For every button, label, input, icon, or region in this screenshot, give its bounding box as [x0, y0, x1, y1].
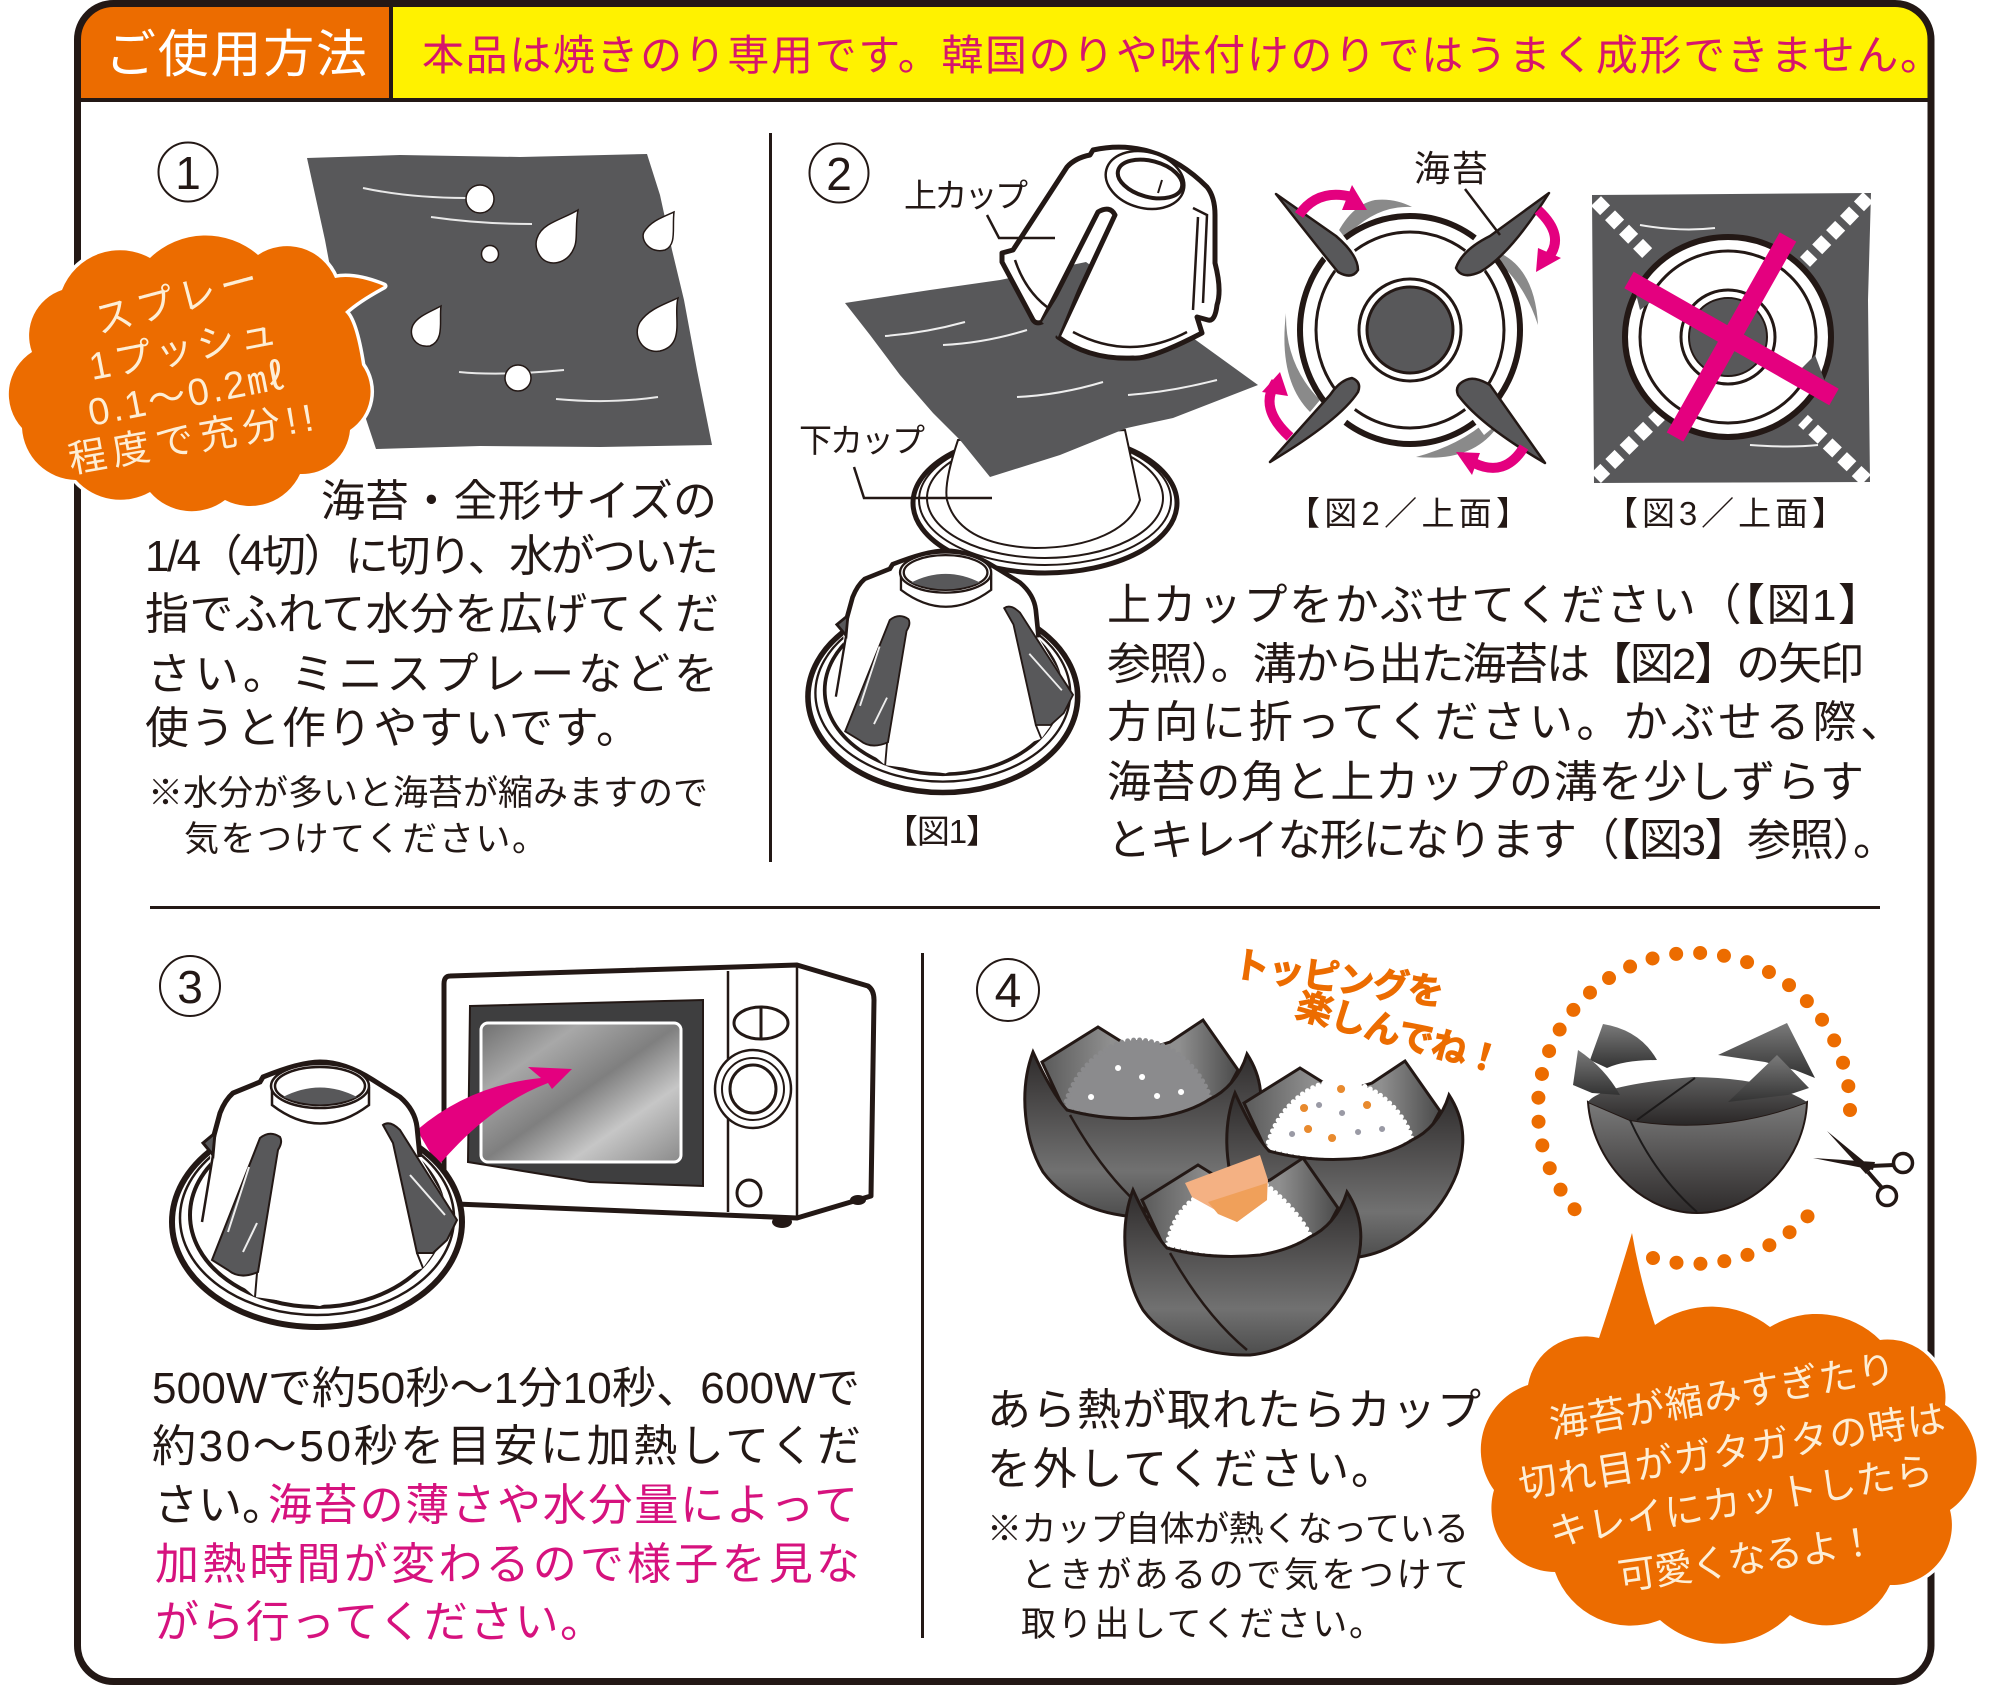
panel: step 3: [152, 956, 874, 1647]
callout: spray amount: 1プッシュ: [86, 311, 280, 389]
header bar: [77, 3, 1942, 102]
step 1 instructions: 使うと作りやすいです。: [145, 704, 640, 753]
step 2 instructions: とキレイな形になります（【図3】参照）。: [1107, 816, 1897, 865]
step number 4: [977, 959, 1039, 1021]
step 2 instructions: 海苔の角と上カップの溝を少しずらす: [1107, 758, 1864, 807]
panel: step 4: [977, 943, 1977, 1644]
figure 3: wrong alignment: [1592, 193, 1871, 483]
step number 3: 3: [177, 961, 203, 1013]
step number 2: 2: [826, 148, 852, 200]
step 3 instructions: がら行ってください。: [155, 1598, 604, 1647]
callout: spray amount: 0.1〜0.2㎖: [85, 355, 289, 435]
step 3 instructions: さい。: [154, 1481, 286, 1530]
panel: step 1: [9, 142, 719, 859]
label: lower cup: [799, 422, 992, 498]
panel: step 2: [799, 143, 1904, 865]
step 3 instructions: 約30〜50秒を目安に加熱してくだ: [152, 1422, 861, 1471]
step 4 note: ときがあるので気をつけて: [1021, 1556, 1469, 1595]
label: seaweed: 海苔: [1414, 148, 1488, 189]
microwave: [444, 965, 874, 1228]
header warning: 本品は焼きのり専用です。韓国のりや味付けのりではうまく成形できません。: [422, 32, 1942, 79]
arrow into microwave: [417, 1067, 572, 1166]
callout: trimming tip: [1481, 1233, 1977, 1644]
step number 1: 1: [175, 147, 201, 199]
topping caption: トッピングを: [1231, 943, 1447, 1013]
caption: figure 3: 【図3／上面】: [1605, 495, 1845, 532]
step 1 note: 気をつけてください。: [184, 820, 547, 859]
label: lower cup: 下カップ: [799, 422, 925, 459]
seaweed cup: salmon rice: [1125, 1155, 1361, 1355]
step 1 instructions: 海苔・全形サイズの: [321, 477, 717, 526]
callout: trimming tip: キレイにカットしたら: [1547, 1449, 1936, 1555]
callout: trimming tip: 切れ目がガタガタの時は: [1516, 1398, 1948, 1507]
step 3 instructions: [152, 1364, 861, 1647]
callout: trimming tip: 可愛くなるよ！: [1615, 1521, 1879, 1599]
step number 2: [810, 144, 868, 202]
icon: scissors: [1813, 1131, 1912, 1206]
trimmed seaweed cup: [1573, 1023, 1815, 1213]
step 4 note: ※カップ自体が熱くなっている: [987, 1510, 1469, 1549]
step number 4: 4: [995, 965, 1021, 1018]
callout: trimming tip: 海苔が縮みすぎたり: [1547, 1348, 1899, 1447]
step 3 instructions: 海苔の薄さや水分量によって: [268, 1481, 858, 1530]
callout: spray amount: 程度で充分!!: [65, 397, 317, 482]
topping caption: [1231, 943, 1507, 1082]
label: seaweed: [1414, 148, 1500, 235]
seaweed cup: furikake rice: [1227, 1061, 1463, 1258]
step 2 instructions: 上カップをかぶせてください（【図1】: [1107, 581, 1882, 630]
cup before heating: [172, 1062, 462, 1327]
step number 3: [160, 956, 220, 1016]
step 2 instructions: 参照）。溝から出た海苔は【図2】の矢印: [1107, 640, 1864, 689]
seaweed cup: sesame rice: [1025, 1020, 1261, 1217]
topping caption: 楽しんでね！: [1292, 984, 1507, 1082]
lower cup: [913, 430, 1177, 573]
upper cup: [1002, 143, 1219, 358]
step 1 instructions: さい。ミニスプレーなどを: [147, 650, 718, 699]
step 1 note: ※水分が多いと海苔が縮みますので: [148, 774, 708, 813]
step 1 instructions: [145, 477, 719, 753]
header title: ご使用方法: [105, 26, 367, 83]
step 4 note: [987, 1510, 1469, 1644]
step 2 instructions: 方向に折ってください。かぶせる際、: [1107, 698, 1904, 747]
step 4 instructions: あら熱が取れたらカップ: [987, 1386, 1481, 1435]
wet seaweed sheet: [307, 154, 712, 449]
label: upper cup: [904, 177, 1055, 238]
figure 2: top view with fold arrows: [1262, 185, 1561, 475]
callout: spray amount: スプレー: [90, 259, 263, 343]
step 3 instructions: 500Wで約50秒〜1分10秒、600Wで: [152, 1364, 860, 1413]
step number 1: [158, 142, 218, 202]
step 1 instructions: 1/4（4切）に切り、水がついた: [145, 532, 719, 581]
caption: figure 2: 【図2／上面】: [1287, 495, 1529, 532]
callout: spray amount: [9, 235, 384, 511]
figure 1: assembled cup: [808, 551, 1078, 793]
caption: figure 1: 【図1】: [885, 813, 999, 850]
seaweed on cup: [845, 262, 1258, 477]
step 1 note: [148, 774, 708, 859]
step 4 instructions: [987, 1386, 1481, 1494]
step 1 instructions: 指でふれて水分を広げてくだ: [145, 590, 719, 639]
step 4 note: 取り出してください。: [1021, 1605, 1384, 1644]
label: upper cup: 上カップ: [904, 177, 1028, 214]
step 3 instructions: 加熱時間が変わるので様子を見な: [155, 1540, 860, 1589]
step 4 instructions: を外してください。: [987, 1445, 1395, 1494]
dotted circle: [1538, 953, 1850, 1264]
step 2 instructions: [1107, 581, 1904, 865]
